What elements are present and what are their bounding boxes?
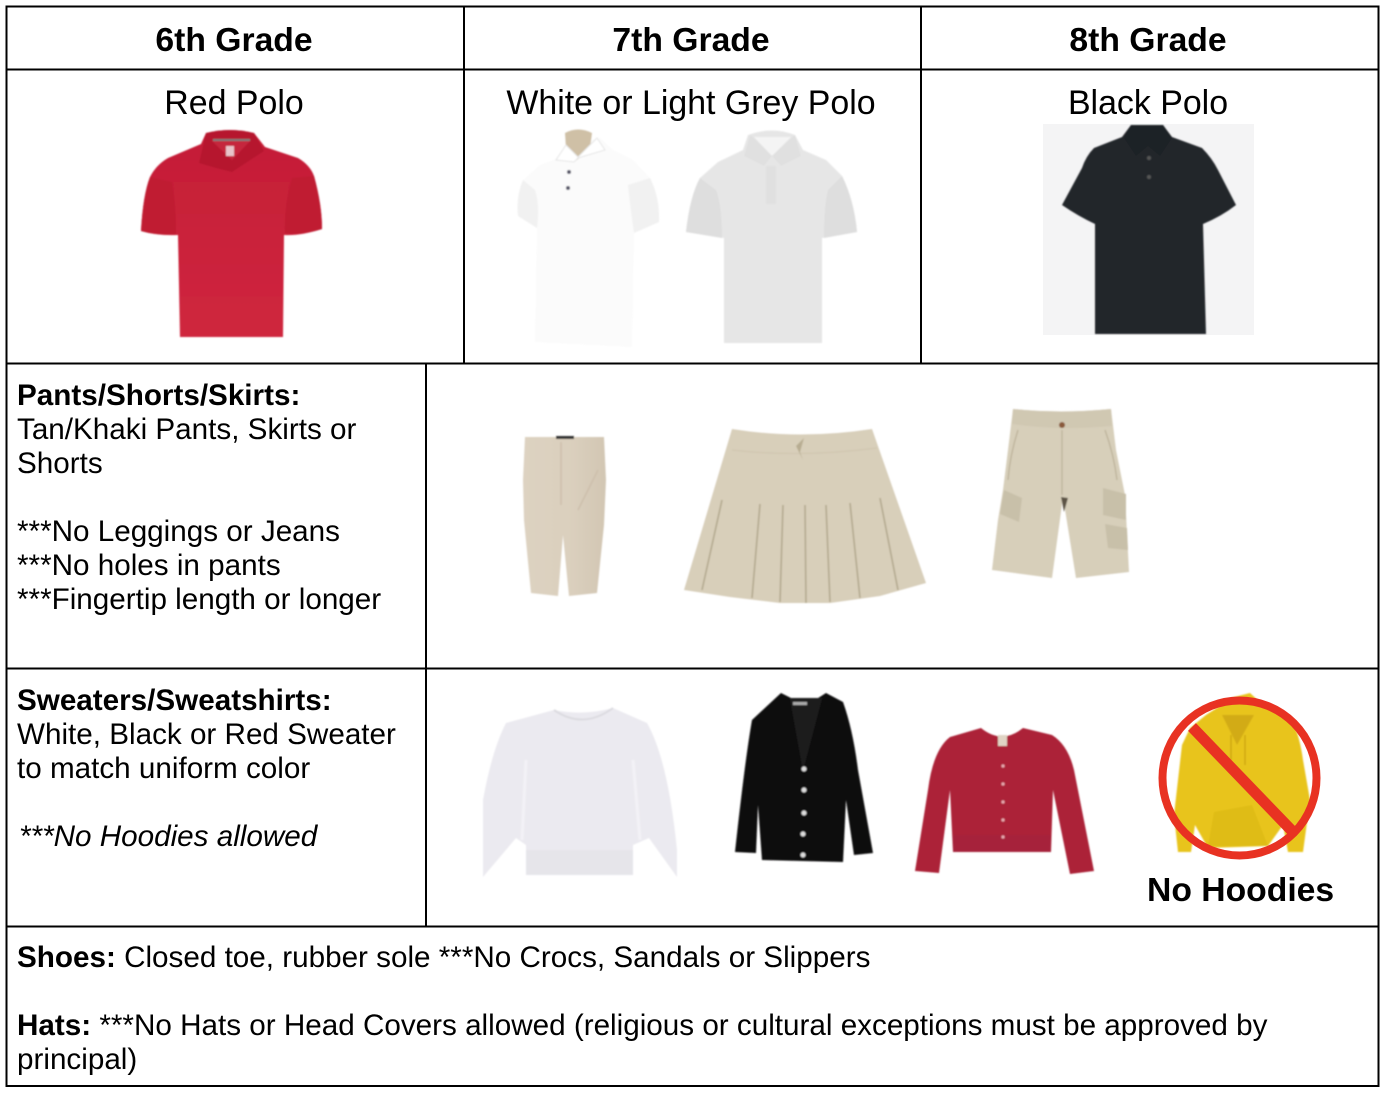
label: white or light grey polo: White or Light Grey Polo xyxy=(506,84,876,122)
image: light grey polo shirt xyxy=(686,130,857,343)
panel: 8th grade xyxy=(1043,21,1254,335)
panel: 7th grade xyxy=(506,21,876,347)
text block: pants rules: ***Fingertip length or longer xyxy=(17,583,381,616)
image: black cardigan xyxy=(735,693,873,862)
text block: pants rules: Pants/Shorts/Skirts: xyxy=(17,379,300,412)
image: black polo shirt xyxy=(1043,124,1254,335)
image: khaki pants xyxy=(523,436,606,596)
panel: shoes and hats xyxy=(17,941,1268,1076)
heading: 8th grade: 8th Grade xyxy=(1069,21,1227,59)
image: white sweatshirt xyxy=(483,708,677,877)
text block: pants rules: ***No Leggings or Jeans xyxy=(17,515,340,548)
text block: pants rules xyxy=(17,379,381,616)
image: yellow hoodie xyxy=(1174,693,1310,852)
text: hats rule continued: principal) xyxy=(17,1043,137,1076)
text block: pants rules: Tan/Khaki Pants, Skirts or xyxy=(17,413,356,446)
heading: 6th grade: 6th Grade xyxy=(155,21,313,59)
image: khaki pleated skirt xyxy=(684,429,926,603)
text block: sweater rules: ***No Hoodies allowed xyxy=(19,820,319,853)
panel: pants, shorts and skirts xyxy=(17,379,1129,616)
image: red polo shirt xyxy=(141,130,322,337)
text block: sweater rules: Sweaters/Sweatshirts: xyxy=(17,684,332,717)
panel: 6th grade xyxy=(141,21,322,337)
text: shoes rule: Shoes: Closed toe, rubber sole ***No Crocs, Sandals or Slippers xyxy=(17,941,870,974)
heading: 7th grade: 7th Grade xyxy=(612,21,770,59)
panel: sweaters and sweatshirts xyxy=(17,684,1334,909)
label: no hoodies: No Hoodies xyxy=(1147,871,1334,909)
text: hats rule: Hats: ***No Hats or Head Covers allowed (religious or cultural exceptions must be approved by xyxy=(17,1009,1268,1042)
text block: sweater rules: to match uniform color xyxy=(17,752,310,785)
label: black polo: Black Polo xyxy=(1068,84,1228,122)
icon: no hoodies prohibition sign xyxy=(1162,693,1316,856)
text block: pants rules: ***No holes in pants xyxy=(17,549,281,582)
image: red cardigan xyxy=(915,728,1094,874)
image: white polo shirt xyxy=(518,130,659,347)
text block: pants rules: Shorts xyxy=(17,447,103,480)
text block: sweater rules: White, Black or Red Sweater xyxy=(17,718,396,751)
label: red polo: Red Polo xyxy=(164,84,304,122)
image: khaki cargo shorts xyxy=(992,409,1129,578)
text block: sweater rules xyxy=(17,684,396,853)
